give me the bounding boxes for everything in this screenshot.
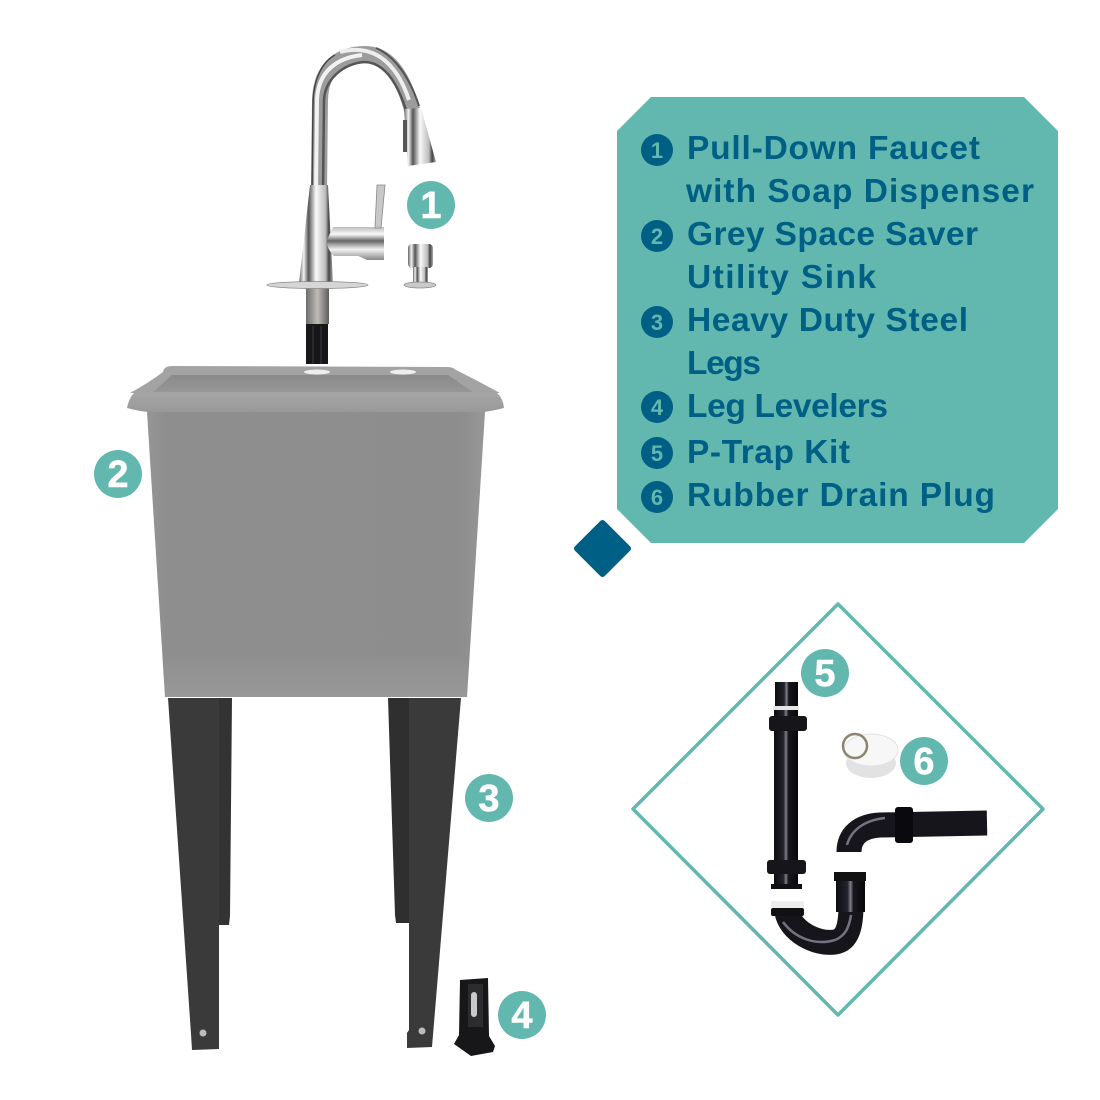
item 2: Grey Space Saver [687, 216, 978, 253]
item 2: Utility Sink [687, 259, 876, 296]
badge 3: 3 [478, 778, 500, 820]
item 6: Rubber Drain Plug [687, 477, 995, 514]
faucet base body [299, 185, 333, 283]
front rim [127, 393, 504, 412]
faucet [267, 48, 436, 364]
icon: dark blue diamond [577, 523, 628, 574]
item 6: 6 [651, 485, 663, 510]
right leg [407, 698, 461, 1048]
threaded shank [306, 288, 329, 324]
item 1: with Soap Dispenser [685, 173, 1034, 210]
panel: parts list [617, 97, 1058, 543]
badge 5 [801, 649, 849, 697]
badge 2: 2 [107, 454, 129, 496]
item 5: P-Trap Kit [687, 434, 850, 471]
badge 6 [900, 737, 948, 785]
legs [168, 698, 461, 1050]
item 3: 3 [651, 310, 663, 335]
badge 4 [498, 991, 546, 1039]
item 4: 4 [651, 395, 664, 420]
spout [312, 48, 419, 190]
item 1: Pull-Down Faucet [687, 130, 980, 167]
elbow [849, 823, 987, 852]
item 1: 1 [651, 138, 663, 163]
soap dispenser [404, 244, 436, 288]
left leg [168, 698, 219, 1050]
handle body [327, 227, 384, 260]
basin opening [153, 375, 473, 392]
item 2 [641, 216, 978, 296]
rubber drain plug [843, 734, 898, 778]
p-trap kit [767, 682, 987, 942]
left leg back [219, 698, 232, 925]
item 5: 5 [651, 441, 663, 466]
item 1 [641, 130, 1034, 210]
badge 4: 4 [511, 995, 533, 1037]
badge 6: 6 [913, 741, 935, 783]
sink body [147, 412, 485, 697]
sink lower band [164, 656, 468, 697]
leg leveler [454, 978, 495, 1056]
sink [127, 366, 504, 697]
item 3: Legs [687, 345, 761, 382]
item 4: Leg Levelers [687, 388, 888, 425]
spray head [404, 108, 436, 166]
item 3: Heavy Duty Steel [687, 302, 968, 339]
right leg back [388, 698, 409, 923]
badge 5: 5 [814, 653, 836, 695]
lever [375, 185, 385, 228]
j-bend [787, 905, 851, 942]
faucet holes [304, 370, 330, 374]
deck plate [267, 282, 368, 288]
badge 2 [94, 450, 142, 498]
badge 1: 1 [420, 185, 442, 227]
item 2: 2 [651, 224, 663, 249]
back rim [130, 366, 500, 393]
item 3 [641, 302, 968, 382]
tailpiece [775, 682, 798, 706]
black hoses [306, 322, 328, 364]
badge 3 [465, 774, 513, 822]
panel: diamond outline [633, 604, 1043, 1015]
badge 1 [407, 181, 455, 229]
